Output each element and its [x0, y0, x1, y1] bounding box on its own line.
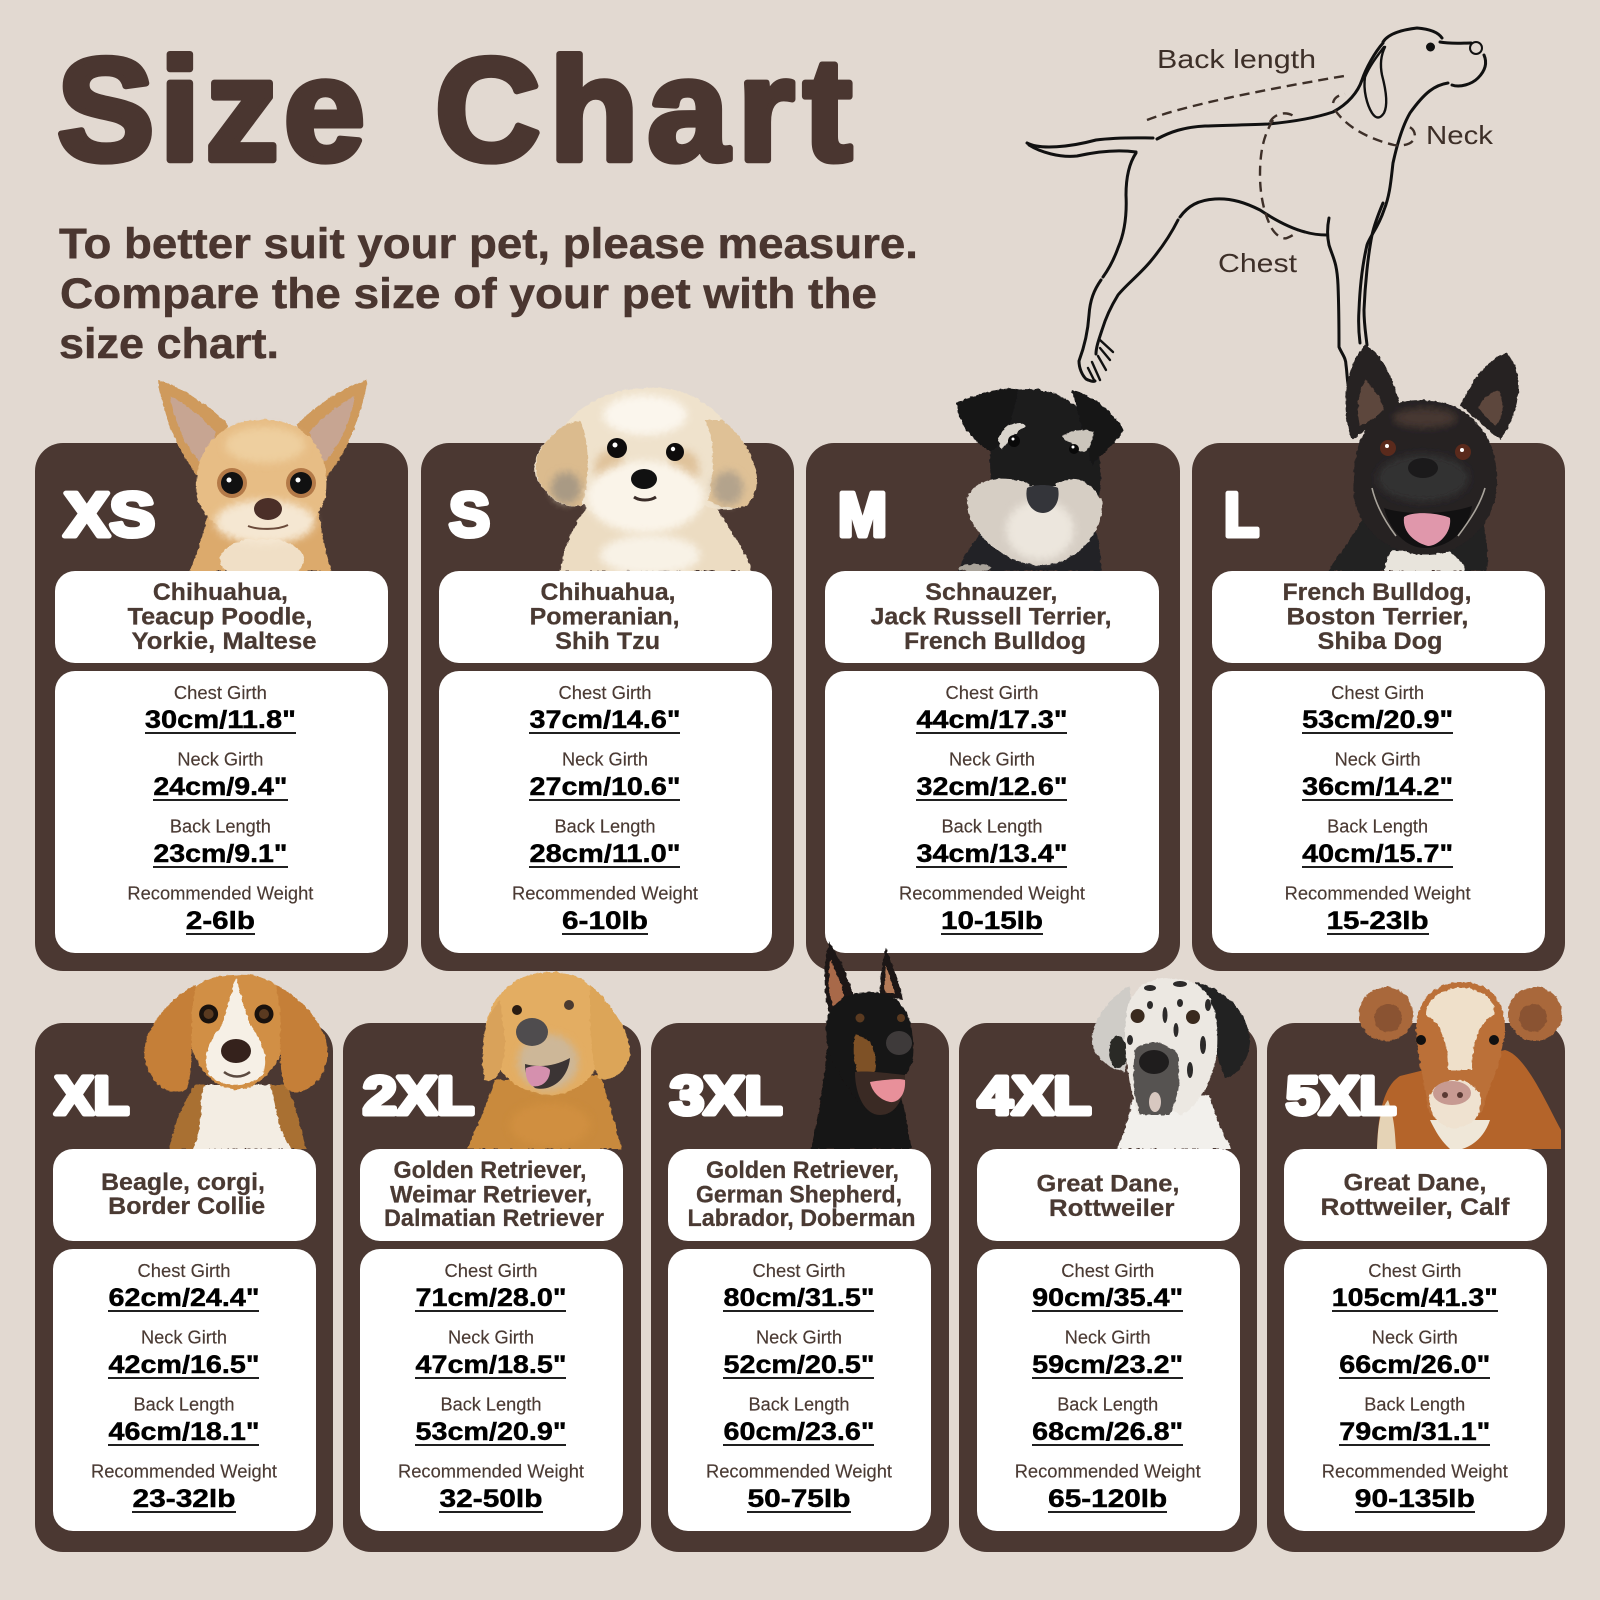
photo: beagle	[144, 975, 328, 1149]
label: chest: Chest	[1218, 248, 1298, 278]
breed box: Border Collie	[108, 1193, 265, 1220]
measurements box: 15-23lb	[1327, 907, 1429, 935]
breed box: French Bulldog,	[1282, 579, 1472, 606]
measurements box: Back Length	[1364, 1394, 1465, 1414]
panel: S	[421, 388, 794, 971]
panel: L	[1192, 345, 1565, 971]
measurements box: Recommended Weight	[398, 1460, 584, 1482]
size label: M	[838, 481, 887, 550]
measurements box: 68cm/26.8"	[1032, 1418, 1183, 1446]
measurements box	[1284, 1249, 1547, 1531]
calf head	[1359, 982, 1562, 1128]
measurements box: Recommended Weight	[1015, 1460, 1201, 1482]
photo: schnauzer	[956, 389, 1124, 572]
measurements box: Neck Girth	[1065, 1326, 1151, 1348]
breed box	[55, 571, 388, 663]
measurements box: 44cm/17.3"	[916, 706, 1068, 734]
breed box: Shiba Dog	[1318, 628, 1442, 655]
panel: XL	[35, 975, 333, 1552]
breed box: Beagle, corgi,	[101, 1169, 265, 1196]
breed box: Pomeranian,	[530, 604, 680, 630]
measurements box: 32cm/12.6"	[916, 773, 1068, 801]
measurements box: Back Length	[1057, 1394, 1158, 1414]
breed box	[825, 571, 1159, 663]
measurements box: Chest Girth	[1331, 682, 1424, 703]
measurements box: Chest Girth	[558, 682, 652, 703]
measurements box: 2-6lb	[186, 907, 255, 935]
measurements box: Recommended Weight	[127, 882, 313, 904]
measurements box: 36cm/14.2"	[1302, 773, 1453, 801]
measurements box: 50-75lb	[748, 1485, 850, 1513]
french bulldog face	[1372, 440, 1485, 548]
measurements box: Chest Girth	[946, 682, 1038, 703]
breed box	[439, 571, 772, 663]
measurements box: Chest Girth	[1368, 1260, 1461, 1281]
golden retriever face	[512, 1000, 574, 1089]
breed box	[1284, 1149, 1547, 1241]
intro text: To better suit your pet, please measure.	[59, 221, 918, 268]
measurements box: 40cm/15.7"	[1302, 840, 1453, 868]
measurements box: 28cm/11.0"	[530, 840, 680, 868]
measurements box: 42cm/16.5"	[108, 1351, 260, 1379]
measurements box: 47cm/18.5"	[416, 1351, 566, 1379]
measurements box	[977, 1249, 1240, 1531]
dashed guide: chest	[1260, 113, 1297, 238]
measurements box: Recommended Weight	[1322, 1460, 1508, 1482]
breed box: Schnauzer,	[925, 579, 1057, 606]
measurements box: Back Length	[748, 1394, 850, 1414]
measurements box: 53cm/20.9"	[1302, 706, 1453, 734]
calf face	[1416, 1035, 1499, 1105]
dashed guide: neck	[1333, 94, 1415, 145]
measurements box: Neck Girth	[1335, 748, 1421, 770]
label: neck: Neck	[1426, 120, 1494, 150]
measurements box: Back Length	[170, 816, 271, 836]
shih tzu face	[607, 438, 684, 500]
measurements box: 46cm/18.1"	[108, 1418, 260, 1446]
measurements box: Back Length	[554, 816, 656, 836]
measurements box: Recommended Weight	[91, 1460, 277, 1482]
card background	[651, 1023, 949, 1552]
measurements box: 6-10lb	[562, 907, 648, 935]
breed box: German Shepherd,	[696, 1182, 902, 1208]
measurements box: 30cm/11.8"	[145, 706, 296, 734]
measurements box: 32-50lb	[440, 1485, 542, 1513]
photo: calf	[1377, 1050, 1561, 1149]
measurements box: Chest Girth	[1061, 1260, 1154, 1281]
breed box: Boston Terrier,	[1286, 604, 1468, 630]
measurements box: Recommended Weight	[706, 1460, 892, 1482]
measuring diagram: dog outline	[1027, 28, 1494, 384]
measurements box: 71cm/28.0"	[416, 1284, 566, 1312]
schnauzer face	[1008, 435, 1079, 513]
breed box: Rottweiler, Calf	[1320, 1194, 1511, 1221]
photo: french bulldog	[1329, 345, 1519, 571]
measurements box: 23-32lb	[132, 1485, 236, 1513]
breed box: Great Dane,	[1344, 1170, 1486, 1196]
measurements box	[825, 671, 1159, 953]
measurements box: 90-135lb	[1355, 1485, 1475, 1513]
measurements box: Neck Girth	[562, 748, 648, 770]
title	[57, 28, 852, 191]
breed box: Golden Retriever,	[394, 1157, 586, 1184]
measurements box: 37cm/14.6"	[530, 706, 680, 734]
measurements box: Neck Girth	[448, 1326, 534, 1348]
measurements box: Neck Girth	[949, 748, 1035, 770]
photo: chihuahua	[158, 380, 367, 582]
panel: 2XL	[343, 972, 641, 1552]
measurements box: Back Length	[942, 816, 1042, 836]
card background	[1192, 443, 1565, 971]
breed box: Jack Russell Terrier,	[870, 604, 1112, 630]
size label: 5XL	[1286, 1066, 1396, 1126]
title: Chart	[435, 28, 852, 191]
panel: 5XL	[1267, 982, 1565, 1552]
size label: L	[1224, 481, 1259, 550]
measurements box: 80cm/31.5"	[724, 1284, 874, 1312]
great dane markings	[1127, 981, 1211, 1112]
photo: great dane	[1091, 978, 1250, 1149]
panel: M	[806, 389, 1180, 971]
breed box: Shih Tzu	[555, 628, 660, 655]
size label: 4XL	[978, 1066, 1091, 1126]
measurements box: Back Length	[1327, 816, 1428, 836]
measurements box: Chest Girth	[138, 1260, 230, 1281]
size label: S	[449, 481, 490, 550]
panel: 3XL	[651, 942, 949, 1552]
measurements box: Neck Girth	[177, 748, 263, 770]
photo: shih tzu	[535, 388, 757, 575]
measurements box: 34cm/13.4"	[916, 840, 1068, 868]
dog line art	[1027, 28, 1486, 384]
measurements box: 79cm/31.1"	[1339, 1418, 1490, 1446]
measurements box: Chest Girth	[444, 1260, 538, 1281]
intro text: Compare the size of your pet with the	[60, 271, 877, 318]
card background	[1267, 1023, 1565, 1552]
measurements box: 90cm/35.4"	[1032, 1284, 1183, 1312]
measurements box	[668, 1249, 931, 1531]
title: Size	[57, 28, 365, 191]
doberman face	[855, 1014, 912, 1115]
measurements box: Neck Girth	[756, 1326, 842, 1348]
measurements box: 53cm/20.9"	[416, 1418, 566, 1446]
breed box: French Bulldog	[904, 628, 1086, 655]
measurements box: Chest Girth	[752, 1260, 846, 1281]
intro text: size chart.	[59, 321, 279, 368]
breed box: Weimar Retriever,	[390, 1182, 592, 1208]
beagle face	[199, 1004, 274, 1076]
measurements box: Recommended Weight	[899, 882, 1085, 904]
intro text	[59, 221, 918, 368]
measurements box: Chest Girth	[174, 682, 267, 703]
size label: XS	[64, 481, 155, 550]
measurements box	[360, 1249, 623, 1531]
breed box	[53, 1149, 316, 1241]
breed box: Dalmatian Retriever	[384, 1205, 604, 1232]
breed box	[668, 1149, 931, 1241]
breed box: Yorkie, Maltese	[132, 628, 316, 655]
measurements box: 60cm/23.6"	[724, 1418, 874, 1446]
measurements box: Neck Girth	[1372, 1326, 1458, 1348]
chihuahua face	[217, 468, 316, 529]
label: back length: Back length	[1157, 44, 1316, 74]
card background	[343, 1023, 641, 1552]
measurements box	[55, 671, 388, 953]
measurements box: Recommended Weight	[1285, 882, 1471, 904]
measurements box: 24cm/9.4"	[153, 773, 287, 801]
breed box: Rottweiler	[1049, 1195, 1174, 1222]
measurements box: Recommended Weight	[512, 882, 698, 904]
measurements box: 105cm/41.3"	[1332, 1284, 1498, 1312]
measurements box: 27cm/10.6"	[530, 773, 680, 801]
measurements box: 59cm/23.2"	[1032, 1351, 1183, 1379]
size label: XL	[55, 1066, 129, 1126]
measurements box	[1212, 671, 1545, 953]
breed box	[977, 1149, 1240, 1241]
measurements box	[53, 1249, 316, 1531]
photo: golden retriever	[467, 972, 630, 1149]
measurements box: 65-120lb	[1048, 1485, 1167, 1513]
size label: 2XL	[363, 1066, 474, 1126]
measurements box: Back Length	[134, 1394, 234, 1414]
breed box	[1212, 571, 1545, 663]
measurements box	[439, 671, 772, 953]
measurements box: 62cm/24.4"	[108, 1284, 260, 1312]
card background	[806, 443, 1180, 971]
measurements box: Back Length	[440, 1394, 542, 1414]
measurements box: Neck Girth	[141, 1326, 227, 1348]
measurements box: 52cm/20.5"	[724, 1351, 874, 1379]
breed box: Teacup Poodle,	[128, 604, 312, 630]
breed box	[360, 1149, 623, 1241]
measurements box: 66cm/26.0"	[1339, 1351, 1490, 1379]
dashed guide: back length	[1147, 76, 1344, 120]
measurements box: 10-15lb	[941, 907, 1043, 935]
breed box: Chihuahua,	[540, 579, 676, 606]
breed box: Chihuahua,	[153, 579, 288, 606]
panel: XS	[35, 380, 408, 971]
card background	[35, 443, 408, 971]
breed box: Great Dane,	[1036, 1170, 1180, 1198]
card background	[959, 1023, 1257, 1552]
breed box: Labrador, Doberman	[688, 1205, 916, 1232]
card background	[35, 1023, 333, 1552]
measurements box: 23cm/9.1"	[153, 840, 287, 868]
breed box: Golden Retriever,	[706, 1157, 899, 1184]
panel: 4XL	[959, 978, 1257, 1552]
size label: 3XL	[670, 1066, 782, 1126]
photo: doberman	[811, 942, 913, 1149]
card background	[421, 443, 794, 971]
